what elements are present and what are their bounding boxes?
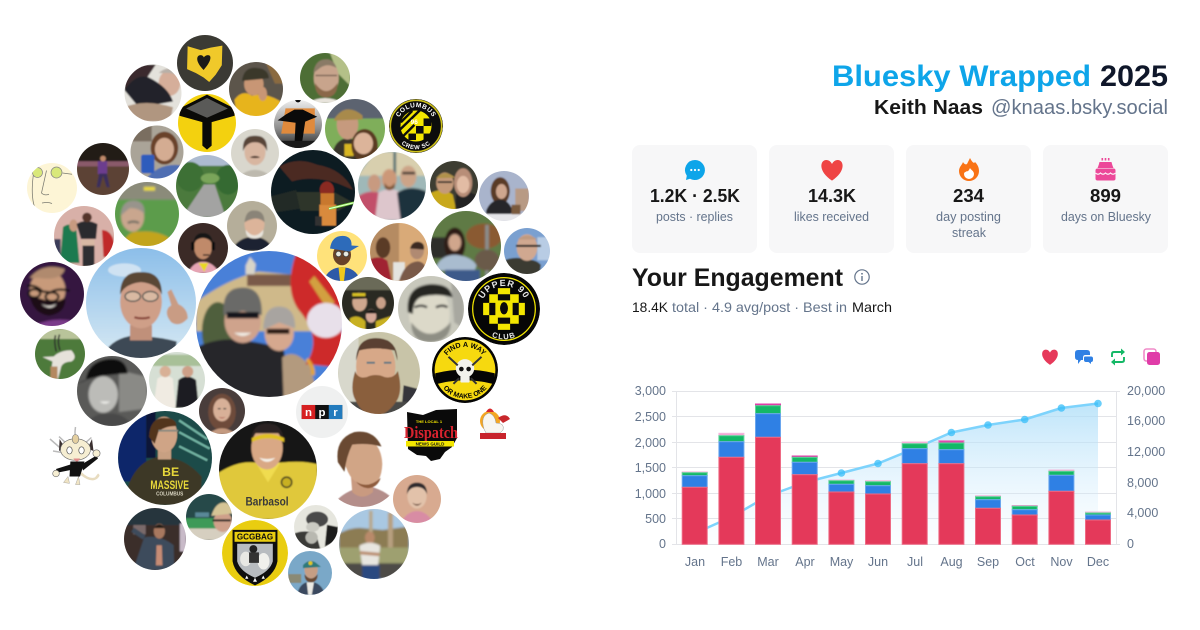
engagement summary text: March — [852, 299, 892, 315]
panel: days on Bluesky stat: days on Bluesky — [1061, 210, 1152, 224]
plot grid — [672, 391, 1120, 544]
right axis labels: 20,000 — [1127, 384, 1165, 398]
icon: birthday cake — [1096, 158, 1116, 180]
avatar: man in stadium — [115, 182, 179, 246]
panel: avatar bubble cloud — [20, 35, 550, 595]
user name and handle — [874, 97, 1168, 119]
chart: monthly engagement — [635, 384, 1165, 569]
icon: legend quotes — [1144, 349, 1160, 365]
avatar: NPR logo — [296, 386, 348, 438]
panel: posts and replies stat — [632, 145, 757, 253]
panel: posts and replies stat: 1.2K · 2.5K — [650, 185, 741, 206]
avatar: speaker in Be Massive shirt: COLUMBUS — [156, 492, 184, 498]
avatar: Columbus Crew SC badge: CREW SC — [402, 141, 430, 150]
month labels: Mar — [757, 555, 779, 569]
avatar: couple in Christmas scene — [196, 251, 342, 397]
left axis labels: 2,500 — [635, 410, 666, 424]
avatar: man in yellow Crew jersey — [212, 414, 324, 526]
month labels: Apr — [795, 555, 815, 569]
month labels: Aug — [940, 555, 963, 569]
left axis labels: 1,500 — [635, 461, 666, 475]
avatar: Upper 90 Club badge: CLUB — [492, 332, 515, 340]
avatar: man in cap — [288, 551, 332, 595]
avatar: mustache man — [231, 129, 279, 177]
month labels: May — [830, 555, 854, 569]
engagement summary text: 18.4K — [632, 299, 669, 315]
avatar: Upper 90 Club badge — [468, 273, 540, 345]
panel: likes stat — [769, 145, 894, 253]
logo: The Local 1 Dispatch News Guild — [404, 409, 458, 461]
icon: flame — [959, 158, 979, 181]
avatar: NPR logo: p — [318, 407, 326, 419]
avatar: woman speaking — [479, 171, 529, 221]
avatar: Columbus Crew SC badge: COLUMBUS — [396, 102, 436, 116]
avatar: GCGBAG badge: GCGBAG — [237, 532, 273, 541]
avatar: dark scene with lego figure — [271, 150, 355, 234]
month labels: Jan — [685, 555, 705, 569]
avatar: man in yellow Crew jersey: Barbasol — [245, 495, 289, 508]
avatar: cream line-drawn face — [26, 162, 78, 214]
logo: The Local 1 Dispatch News Guild: Dispatch — [404, 423, 458, 442]
avatar: group of fans — [342, 277, 394, 329]
avatar: smiling man in purple — [20, 262, 84, 326]
month labels: Jun — [868, 555, 888, 569]
month labels — [685, 555, 1109, 569]
avatar: man beside Pope cutout — [145, 348, 209, 412]
avatar: GCGBAG badge — [222, 520, 288, 586]
avatar: speaker in Be Massive shirt: BE — [162, 465, 179, 479]
right axis labels: 16,000 — [1127, 414, 1165, 428]
left axis labels: 1,000 — [635, 487, 666, 501]
icon: chat bubble — [685, 160, 705, 180]
stacked bars — [682, 404, 1110, 544]
avatar: woman with mug — [130, 126, 184, 178]
avatar: NPR logo: n — [305, 407, 312, 419]
area: cumulative engagement — [695, 404, 1098, 544]
avatar: two men dining — [370, 223, 428, 281]
engagement summary text: total · 4.9 avg/post · Best in — [672, 299, 847, 315]
avatar: Columbus Crew SC badge: 96 — [411, 119, 418, 126]
avatar: speaker in Be Massive shirt: MASSIVE — [150, 478, 189, 492]
avatar: man with black glasses — [504, 228, 550, 274]
avatar: Ohio heart — [176, 34, 234, 92]
heading: Your Engagement: Your Engagement — [632, 264, 844, 292]
avatar: Upper 90 Club badge: UPPER 90 — [478, 280, 529, 298]
avatar: smiling gray-haired man — [227, 201, 277, 251]
avatar: man looking up — [336, 430, 390, 507]
line: cumulative engagement — [695, 404, 1098, 533]
avatar: Columbus Crew SC badge — [389, 99, 443, 153]
logo: The Local 1 Dispatch News Guild: THE LOCAL 1 — [416, 419, 443, 424]
avatar: woman in black hat — [72, 351, 152, 431]
avatar: man pointing, blue sky — [86, 248, 196, 358]
panel: likes stat: 14.3K — [808, 185, 857, 206]
avatar: couple in yellow scarves — [430, 161, 478, 209]
right axis labels: 12,000 — [1127, 445, 1165, 459]
avatar: silhouette in chair — [274, 100, 322, 148]
title: Bluesky Wrapped — [832, 60, 1091, 93]
engagement summary text — [632, 299, 892, 315]
avatar: NPR logo: r — [333, 407, 338, 419]
panel: likes stat: likes received — [794, 210, 869, 224]
avatar: man with headset — [178, 223, 228, 273]
avatar: yellow hoodie man — [229, 62, 283, 116]
avatar: party group — [54, 206, 114, 266]
user name and handle: Keith Naas — [874, 97, 983, 119]
avatar: smiling man with glasses — [300, 53, 350, 103]
panel: posting streak stat: streak — [952, 226, 987, 240]
avatar: gravel garden path — [176, 155, 238, 217]
avatar: black and white child photo — [294, 505, 338, 549]
month labels: Jul — [907, 555, 923, 569]
panel: posts and replies stat: posts · replies — [656, 210, 733, 224]
logo: rooster mascot — [480, 408, 510, 439]
right axis labels: 8,000 — [1127, 476, 1158, 490]
avatar: cartoon man in blue — [316, 230, 368, 282]
icon: legend reposts — [1111, 348, 1125, 366]
avatar: gazelle — [35, 329, 85, 379]
panel: posting streak stat: day posting — [936, 210, 1001, 224]
right axis labels — [1127, 384, 1165, 551]
left axis labels: 500 — [645, 512, 666, 526]
avatar: three men on patio — [358, 152, 426, 220]
avatar: man at Roman ruins — [339, 509, 409, 579]
title: 2025 — [1100, 60, 1168, 93]
avatar: Find A Way Or Make One badge — [432, 337, 498, 403]
month labels: Sep — [977, 555, 999, 569]
panel: days on Bluesky stat: 899 — [1090, 185, 1121, 206]
logo: The Local 1 Dispatch News Guild: NEWS GUILD — [416, 442, 445, 447]
month labels: Feb — [721, 555, 742, 569]
month labels: Oct — [1015, 555, 1035, 569]
left axis labels — [635, 384, 666, 551]
avatar: speaker in Be Massive shirt — [111, 404, 219, 512]
left axis labels: 2,000 — [635, 436, 666, 450]
right axis labels: 0 — [1127, 537, 1134, 551]
avatar: Find A Way Or Make One badge: FIND A WAY — [444, 342, 486, 356]
avatar: figure in purple on street — [77, 143, 129, 195]
avatar: woman with animals — [431, 211, 501, 281]
left axis labels: 3,000 — [635, 384, 666, 398]
avatar: couple at stadium — [325, 99, 385, 159]
avatar: woman with long brown hair — [196, 385, 248, 437]
legend icons — [1042, 348, 1160, 366]
avatar: black and white man — [398, 276, 464, 342]
avatar: Find A Way Or Make One badge: OR MAKE ONE — [444, 385, 487, 398]
panel: days on Bluesky stat — [1043, 145, 1168, 253]
panel: posting streak stat: 234 — [953, 185, 985, 206]
user name and handle: @knaas.bsky.social — [991, 97, 1168, 119]
icon: legend heart — [1042, 350, 1058, 365]
line data points — [838, 400, 1102, 477]
right axis labels: 4,000 — [1127, 506, 1158, 520]
avatar: bearded man — [338, 332, 420, 414]
panel: posting streak stat — [906, 145, 1031, 253]
avatar: man in pink shirt — [393, 475, 441, 523]
month labels: Nov — [1050, 555, 1073, 569]
avatar: man in straw hat at stadium — [183, 491, 235, 543]
left axis labels: 0 — [659, 537, 666, 551]
avatar: cat and man — [124, 64, 182, 122]
icon: legend replies — [1075, 350, 1093, 364]
avatar: Meowth in suit — [50, 427, 100, 485]
avatar: T logo — [177, 93, 237, 153]
icon: info — [855, 270, 869, 284]
avatar: man speaking, dark room — [119, 503, 191, 575]
month labels: Dec — [1087, 555, 1109, 569]
icon: heart — [821, 160, 843, 181]
